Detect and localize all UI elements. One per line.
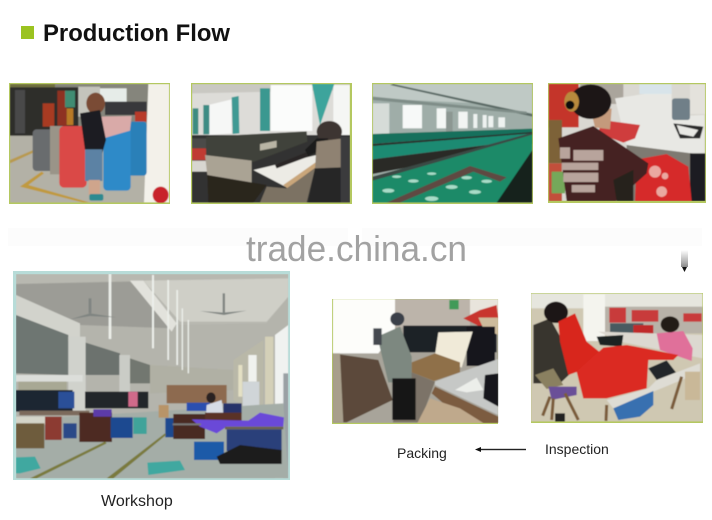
title: Production Flow (43, 20, 230, 47)
photo: material rolls (9, 83, 170, 204)
photo: packing (332, 299, 498, 424)
arrow: small down arrow (681, 250, 688, 272)
photo: cutting machine (191, 83, 352, 204)
label: Workshop: Workshop (101, 493, 173, 510)
photo: inspection (531, 293, 703, 423)
arrow: inspection to packing (475, 447, 526, 452)
photo: screen printing line (372, 83, 533, 204)
watermark faint text band (8, 228, 702, 246)
watermark: trade.china.cn (246, 228, 467, 269)
label: Inspection: Inspection (545, 441, 609, 457)
label: Packing: Packing (397, 445, 447, 461)
icon: green square bullet (21, 26, 34, 39)
photo: workshop (13, 271, 290, 480)
photo: sewing worker (548, 83, 706, 203)
